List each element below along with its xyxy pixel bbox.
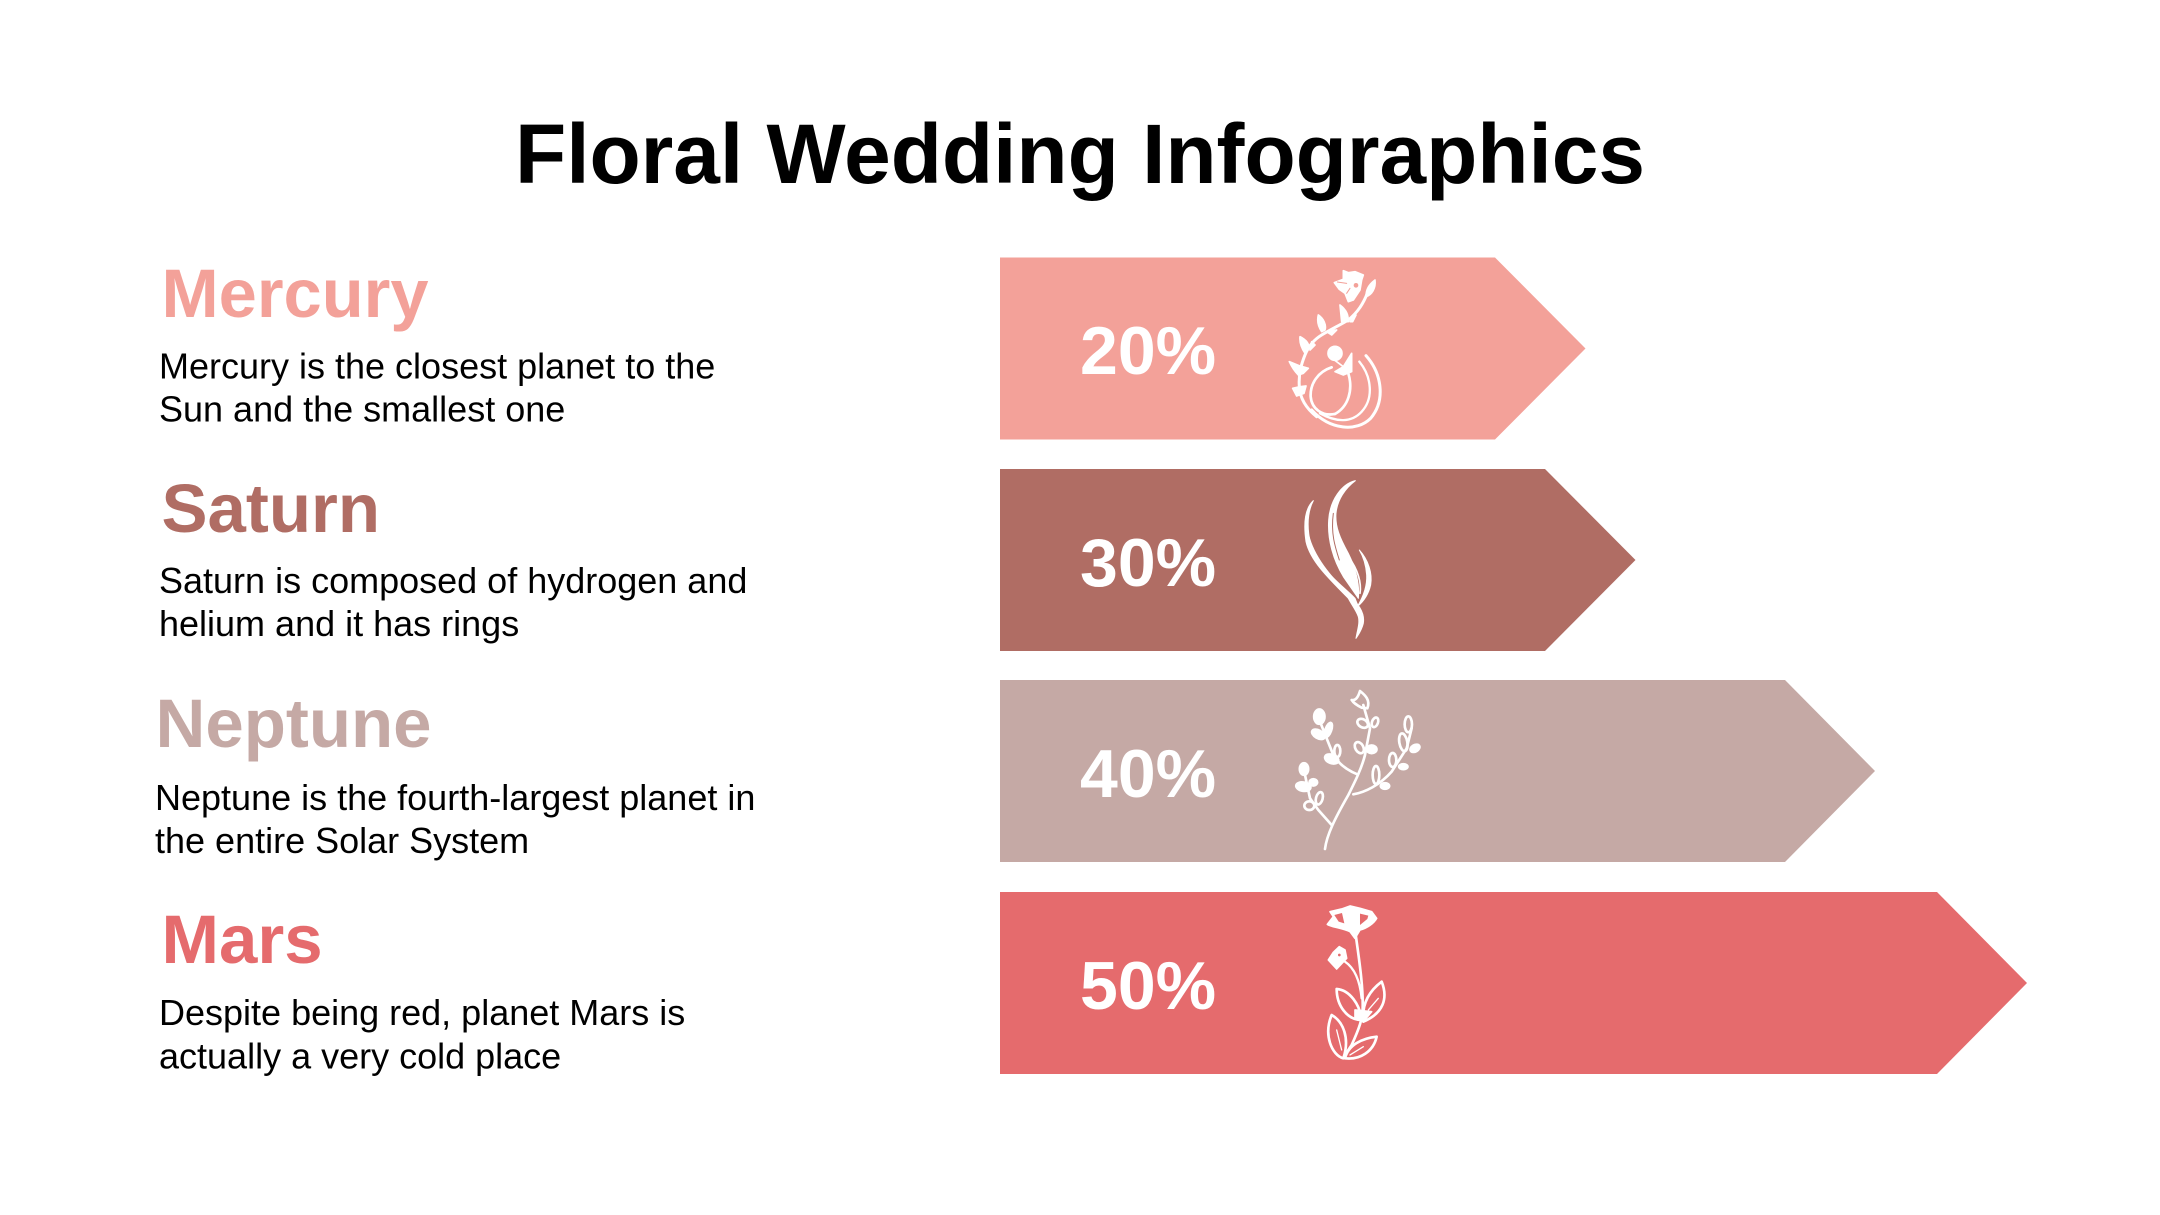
description: Neptune: Neptune is the fourth-largest planet in bbox=[155, 777, 755, 818]
heading: Mercury: Mercury bbox=[162, 255, 428, 332]
description: Saturn: helium and it has rings bbox=[159, 603, 519, 644]
heading: Neptune: Neptune bbox=[156, 685, 432, 762]
arrow bar: Mercury 20% bbox=[1000, 258, 1586, 440]
value: 40%: 40% bbox=[1080, 736, 1216, 812]
value: 20%: 20% bbox=[1080, 313, 1216, 389]
heading: Mars: Mars bbox=[162, 901, 323, 978]
arrow bar: Saturn 30% bbox=[1000, 469, 1636, 651]
description: Mars: Despite being red, planet Mars is bbox=[159, 992, 685, 1033]
value: 50%: 50% bbox=[1080, 948, 1216, 1024]
description: Mercury: Sun and the smallest one bbox=[159, 388, 565, 430]
panel: Neptune text bbox=[155, 685, 755, 861]
arrow bar: Neptune 40% bbox=[1000, 680, 1875, 862]
icon: flower stem bbox=[1327, 906, 1384, 1059]
panel: Mercury text bbox=[159, 255, 715, 430]
description: Mars: actually a very cold place bbox=[159, 1036, 561, 1076]
description: Mercury: Mercury is the closest planet to the bbox=[159, 346, 715, 386]
heading: Saturn: Saturn bbox=[162, 470, 380, 547]
icon: feathered leaves bbox=[1305, 481, 1371, 638]
icon: floral wreath bbox=[1289, 271, 1380, 427]
panel: Saturn text bbox=[159, 470, 747, 644]
arrow bar: Mars 50% bbox=[1000, 892, 2027, 1074]
icon: leafy sprig bbox=[1295, 691, 1421, 849]
title: Floral Wedding Infographics bbox=[515, 107, 1645, 201]
description: Saturn: Saturn is composed of hydrogen and bbox=[159, 560, 747, 601]
value: 30%: 30% bbox=[1080, 525, 1216, 601]
panel: Mars text bbox=[159, 901, 685, 1076]
description: Neptune: the entire Solar System bbox=[155, 820, 529, 861]
